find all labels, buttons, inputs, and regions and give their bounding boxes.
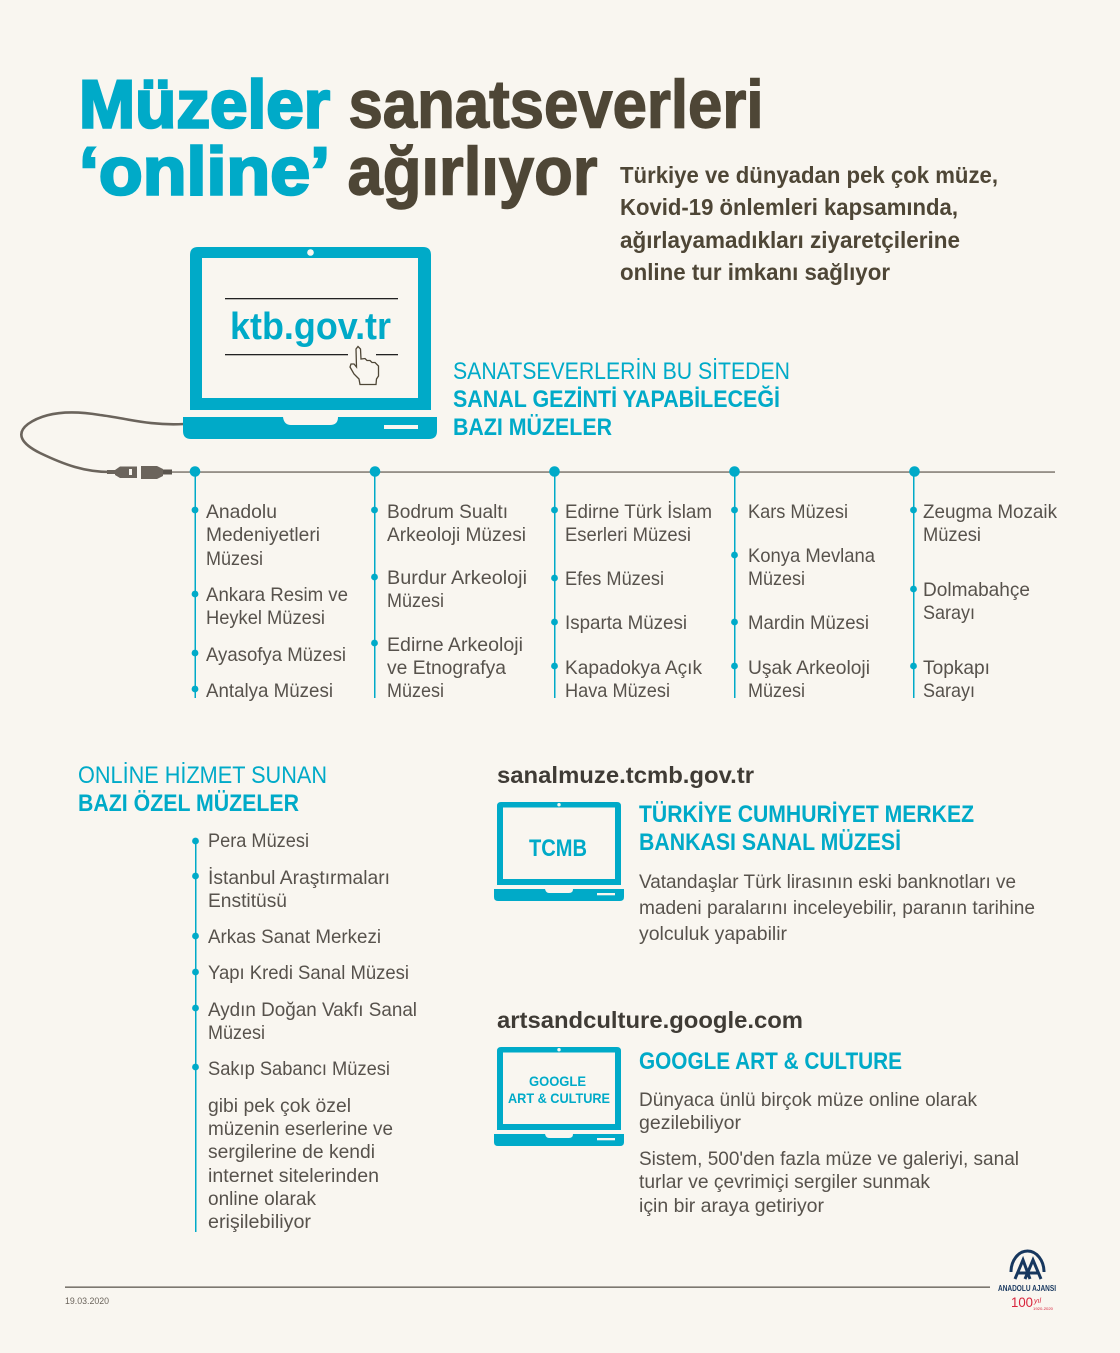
- list: private museums: gibi pek çok özel: [208, 1095, 351, 1117]
- icon: cable and connector: [21, 412, 184, 479]
- column 3: Kapadokya Açık: [565, 657, 702, 679]
- column 1: [190, 466, 348, 702]
- column 2: Müzesi: [387, 590, 444, 612]
- icon: main laptop with ktb.gov.tr: ktb.gov.tr: [230, 306, 391, 348]
- heading: virtual tour museums: SANATSEVERLERİN BU SİTEDEN: [453, 358, 790, 385]
- google description: için bir araya getiriyor: [639, 1195, 824, 1217]
- title: ‘online’: [79, 134, 330, 210]
- heading: virtual tour museums: [453, 358, 790, 441]
- column 5: Sarayı: [923, 602, 975, 624]
- google description: GOOGLE ART & CULTURE: [639, 1048, 902, 1075]
- date: 19.03.2020: [65, 1296, 109, 1306]
- column 5: Zeugma Mozaik: [923, 501, 1057, 523]
- url: tcmb: sanalmuze.tcmb.gov.tr: [497, 762, 754, 788]
- timeline rule: [172, 471, 1055, 473]
- heading: private museums: ONLİNE HİZMET SUNAN: [78, 762, 327, 789]
- intro text: [620, 162, 998, 285]
- title: sanatseverleri: [348, 66, 764, 142]
- column 4: Kars Müzesi: [748, 501, 848, 523]
- google description: Sistem, 500'den fazla müze ve galeriyi, sanal: [639, 1148, 1019, 1170]
- icon: tcmb laptop: TCMB: [529, 835, 587, 862]
- list: private museums: online olarak: [208, 1188, 316, 1210]
- heading: virtual tour museums: BAZI MÜZELER: [453, 414, 612, 441]
- list: private museums: [192, 830, 417, 1233]
- column 2: [370, 466, 527, 702]
- column 5: [909, 466, 1057, 702]
- column 1: Antalya Müzesi: [206, 680, 333, 702]
- tcmb description: [639, 801, 1035, 945]
- column 1: Müzesi: [206, 548, 263, 570]
- column 2: Arkeoloji Müzesi: [387, 524, 526, 546]
- list: private museums: İstanbul Araştırmaları: [208, 866, 390, 889]
- logo: anadolu ajansi: 1920-2020: [1033, 1306, 1054, 1311]
- list: private museums: Pera Müzesi: [208, 830, 309, 852]
- list: private museums: Arkas Sanat Merkezi: [208, 926, 381, 948]
- list: private museums: sergilerine de kendi: [208, 1141, 375, 1163]
- tcmb description: yolculuk yapabilir: [639, 923, 787, 945]
- column 4: Müzesi: [748, 680, 805, 702]
- tcmb description: TÜRKİYE CUMHURİYET MERKEZ: [639, 801, 974, 828]
- column 3: Isparta Müzesi: [565, 612, 687, 634]
- tcmb description: Vatandaşlar Türk lirasının eski banknotları ve: [639, 871, 1016, 893]
- column 4: Konya Mevlana: [748, 545, 875, 567]
- google description: [639, 1048, 1019, 1217]
- title: [79, 66, 764, 210]
- logo: anadolu ajansi: 100: [1011, 1294, 1033, 1310]
- footer rule: [65, 1286, 990, 1288]
- column 4: Mardin Müzesi: [748, 612, 869, 634]
- column 4: [729, 466, 875, 702]
- column 4: Müzesi: [748, 568, 805, 590]
- column 2: Bodrum Sualtı: [387, 501, 508, 523]
- column 2: Edirne Arkeoloji: [387, 634, 523, 656]
- column 5: Müzesi: [923, 524, 981, 546]
- list: private museums: internet sitelerinden: [208, 1165, 379, 1187]
- logo: anadolu ajansi: ANADOLU AJANSI: [998, 1283, 1056, 1293]
- column 5: Topkapı: [923, 657, 990, 679]
- list: private museums: erişilebiliyor: [208, 1211, 311, 1233]
- list: private museums: Yapı Kredi Sanal Müzesi: [208, 962, 409, 984]
- intro text: ağırlayamadıkları ziyaretçilerine: [620, 227, 960, 253]
- title: Müzeler: [79, 66, 330, 142]
- list: private museums: Aydın Doğan Vakfı Sanal: [208, 999, 417, 1021]
- google description: gezilebiliyor: [639, 1112, 741, 1134]
- logo: anadolu ajansi: [998, 1251, 1056, 1311]
- column 3: Hava Müzesi: [565, 680, 670, 702]
- column 3: Edirne Türk İslam: [565, 500, 712, 523]
- column 3: Eserleri Müzesi: [565, 524, 691, 546]
- url: google: artsandculture.google.com: [497, 1007, 803, 1033]
- google description: turlar ve çevrimiçi sergiler sunmak: [639, 1171, 930, 1193]
- icon: main laptop with ktb.gov.tr: [183, 247, 437, 439]
- logo: anadolu ajansi: yıl: [1033, 1298, 1041, 1305]
- icon: google laptop: GOOGLE: [529, 1073, 586, 1089]
- list: private museums: müzenin eserlerine ve: [208, 1118, 393, 1140]
- column 1: Ankara Resim ve: [206, 584, 348, 606]
- list: private museums: Enstitüsü: [208, 890, 287, 912]
- heading: private museums: [78, 762, 327, 817]
- column 2: ve Etnografya: [387, 657, 506, 679]
- tcmb description: madeni paralarını inceleyebilir, paranın tarihine: [639, 897, 1035, 919]
- intro text: Kovid-19 önlemleri kapsamında,: [620, 194, 958, 220]
- column 3: Efes Müzesi: [565, 568, 664, 590]
- title: ağırlıyor: [348, 134, 598, 210]
- column 2: Burdur Arkeoloji: [387, 567, 527, 589]
- column 1: Ayasofya Müzesi: [206, 644, 346, 666]
- icon: google laptop: [494, 1047, 624, 1146]
- heading: private museums: BAZI ÖZEL MÜZELER: [78, 790, 299, 817]
- column 5: Sarayı: [923, 680, 975, 702]
- list: private museums: Müzesi: [208, 1022, 265, 1044]
- column 1: Heykel Müzesi: [206, 607, 325, 629]
- icon: google laptop: ART & CULTURE: [508, 1090, 610, 1106]
- google description: Dünyaca ünlü birçok müze online olarak: [639, 1089, 977, 1111]
- column 3: [549, 466, 712, 702]
- heading: virtual tour museums: SANAL GEZİNTİ YAPABİLECEĞİ: [453, 385, 780, 413]
- column 1: Medeniyetleri: [206, 524, 320, 546]
- icon: tcmb laptop: [494, 802, 624, 901]
- list: private museums: Sakıp Sabancı Müzesi: [208, 1058, 390, 1080]
- column 2: Müzesi: [387, 680, 444, 702]
- column 4: Uşak Arkeoloji: [748, 657, 870, 679]
- column 5: Dolmabahçe: [923, 579, 1030, 601]
- intro text: Türkiye ve dünyadan pek çok müze,: [620, 162, 998, 188]
- column 1: Anadolu: [206, 501, 277, 523]
- intro text: online tur imkanı sağlıyor: [620, 259, 890, 285]
- tcmb description: BANKASI SANAL MÜZESİ: [639, 829, 901, 856]
